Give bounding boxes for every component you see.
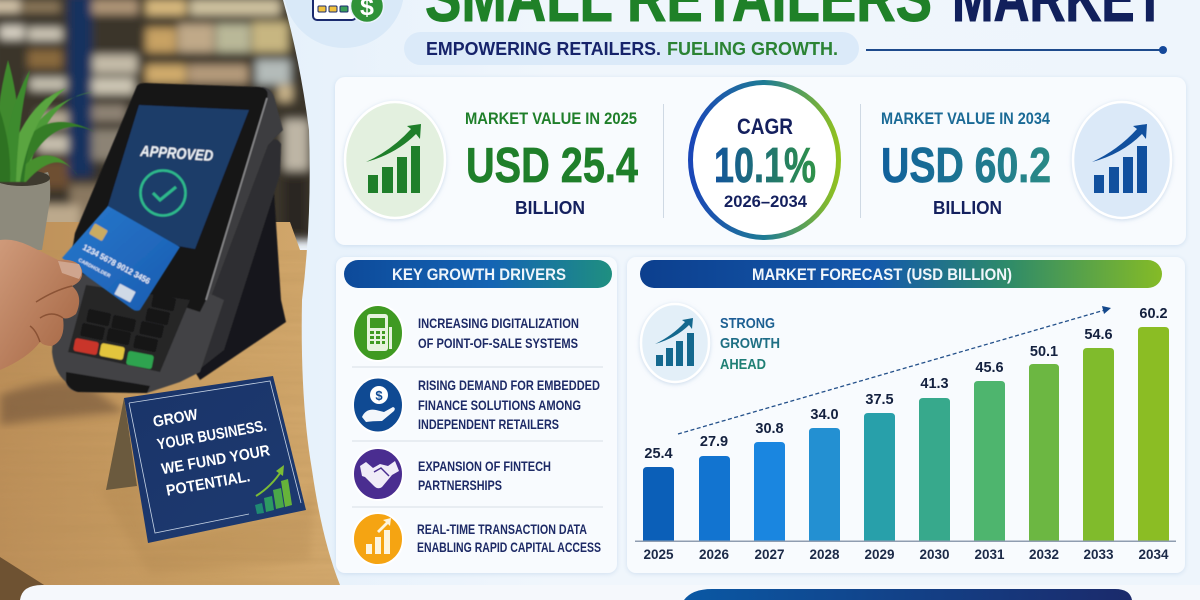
sign text: POTENTIAL. xyxy=(165,468,252,500)
top badge icon: payment terminal and dollar coin xyxy=(284,0,404,48)
year labels: 2033 xyxy=(1083,547,1114,562)
subtitle pill: FUELING GROWTH. xyxy=(667,38,838,59)
driver 2: FINANCE SOLUTIONS AMONG xyxy=(418,397,581,413)
icon: rising bars xyxy=(353,513,403,565)
year labels: 2026 xyxy=(699,547,730,562)
heading: key growth drivers xyxy=(344,260,612,288)
market value 2025: BILLION xyxy=(515,197,585,218)
strong growth ahead text xyxy=(720,315,780,373)
market value 2025: MARKET VALUE IN 2025 xyxy=(465,109,637,128)
value labels: 30.8 xyxy=(755,421,784,437)
subtitle pill xyxy=(404,32,859,65)
value labels: 50.1 xyxy=(1030,344,1058,360)
driver 2: INDEPENDENT RETAILERS xyxy=(418,416,559,432)
icon: handshake xyxy=(353,448,403,500)
hand holding credit card xyxy=(0,206,180,370)
card terminal xyxy=(52,83,286,393)
sign text xyxy=(152,395,276,500)
driver 3: EXPANSION OF FINTECH xyxy=(418,458,551,474)
panel: key growth drivers xyxy=(336,257,617,573)
year labels: 2031 xyxy=(974,547,1005,562)
check mark icon xyxy=(140,170,186,216)
year labels: 2028 xyxy=(809,547,840,562)
market value 2034: BILLION xyxy=(933,197,1002,218)
year labels: 2029 xyxy=(864,547,895,562)
year labels: 2034 xyxy=(1138,547,1169,562)
driver 2: RISING DEMAND FOR EMBEDDED xyxy=(418,377,600,393)
driver 4 xyxy=(353,513,601,565)
bars xyxy=(643,327,1169,541)
market value 2034: MARKET VALUE IN 2034 xyxy=(881,109,1050,128)
icon: POS terminal xyxy=(353,305,403,361)
blurred store shelves background xyxy=(0,0,330,245)
approval screen xyxy=(100,105,249,249)
CAGR ring: 10.1% xyxy=(714,139,816,193)
credit card xyxy=(62,206,180,311)
panel: market value summary xyxy=(335,77,1186,245)
bottom navy pill xyxy=(684,589,1132,600)
sign mini chart xyxy=(255,465,292,514)
background sheet behind the content xyxy=(283,0,1200,600)
icon: hand with coin xyxy=(353,378,403,432)
market value 2025: USD 25.4 xyxy=(466,139,638,193)
CAGR ring: 2026–2034 xyxy=(724,192,808,211)
terminal base xyxy=(52,233,224,393)
value labels: 60.2 xyxy=(1139,306,1168,322)
credit card: 1234 5678 9012 3456 xyxy=(81,242,152,286)
value labels: 34.0 xyxy=(810,407,839,423)
approved label: APPROVED xyxy=(139,143,214,165)
driver 3: PARTNERSHIPS xyxy=(418,477,502,493)
bar chart xyxy=(635,306,1176,562)
strong growth ahead text: STRONG xyxy=(720,315,775,332)
sign text: WE FUND YOUR xyxy=(160,442,271,478)
driver 2 xyxy=(353,377,600,432)
driver 4: ENABLING RAPID CAPITAL ACCESS xyxy=(417,539,601,555)
driver 1: INCREASING DIGITALIZATION xyxy=(418,315,579,331)
driver 3 xyxy=(353,448,551,500)
arrow: dashed trend line xyxy=(678,306,1111,434)
heading: key growth drivers: KEY GROWTH DRIVERS xyxy=(392,266,566,284)
panel: market forecast xyxy=(627,257,1185,573)
strong growth ahead text: AHEAD xyxy=(720,356,766,373)
year labels: 2032 xyxy=(1029,547,1059,562)
credit card: CARDHOLDER xyxy=(77,257,112,280)
wooden counter xyxy=(0,222,350,600)
strong growth ahead text: GROWTH xyxy=(720,335,780,352)
value labels: 45.6 xyxy=(975,360,1004,376)
value labels xyxy=(644,306,1168,462)
value labels: 41.3 xyxy=(920,376,949,392)
plant in concrete pot xyxy=(0,60,95,250)
market value 2025 xyxy=(465,109,638,218)
driver 4: REAL-TIME TRANSACTION DATA xyxy=(417,521,587,537)
CAGR ring xyxy=(690,82,838,238)
heading: market forecast: MARKET FORECAST (USD BILLION) xyxy=(752,266,1012,284)
value labels: 37.5 xyxy=(865,392,894,408)
driver 1 xyxy=(353,305,579,361)
photo: point-of-sale terminal on retail counter xyxy=(0,0,350,600)
value labels: 25.4 xyxy=(644,446,673,462)
icon: strong growth badge xyxy=(641,304,709,382)
year labels: 2027 xyxy=(754,547,785,562)
CAGR ring: CAGR xyxy=(737,114,793,139)
icon: blue growth chart xyxy=(1073,102,1171,218)
year labels: 2030 xyxy=(919,547,950,562)
sign text: YOUR BUSINESS. xyxy=(156,418,268,454)
market value 2034 xyxy=(881,109,1051,218)
table sign xyxy=(106,376,306,543)
year labels xyxy=(643,547,1169,562)
subtitle pill: EMPOWERING RETAILERS. xyxy=(426,38,661,59)
terminal rear stand xyxy=(175,175,286,380)
value labels: 27.9 xyxy=(700,434,728,450)
market value 2034: USD 60.2 xyxy=(881,139,1051,193)
driver 1: OF POINT-OF-SALE SYSTEMS xyxy=(418,335,578,351)
year labels: 2025 xyxy=(643,547,674,562)
sign text: GROW xyxy=(152,406,199,431)
keypad xyxy=(68,285,190,372)
bottom panel strip xyxy=(20,585,1200,600)
terminal screen bezel xyxy=(70,83,268,312)
heading: market forecast xyxy=(640,260,1162,288)
icon: hand with coin: $ xyxy=(375,388,383,403)
subtitle line with dot xyxy=(866,46,1167,54)
icon: green growth chart xyxy=(345,102,445,218)
value labels: 54.6 xyxy=(1084,327,1113,343)
